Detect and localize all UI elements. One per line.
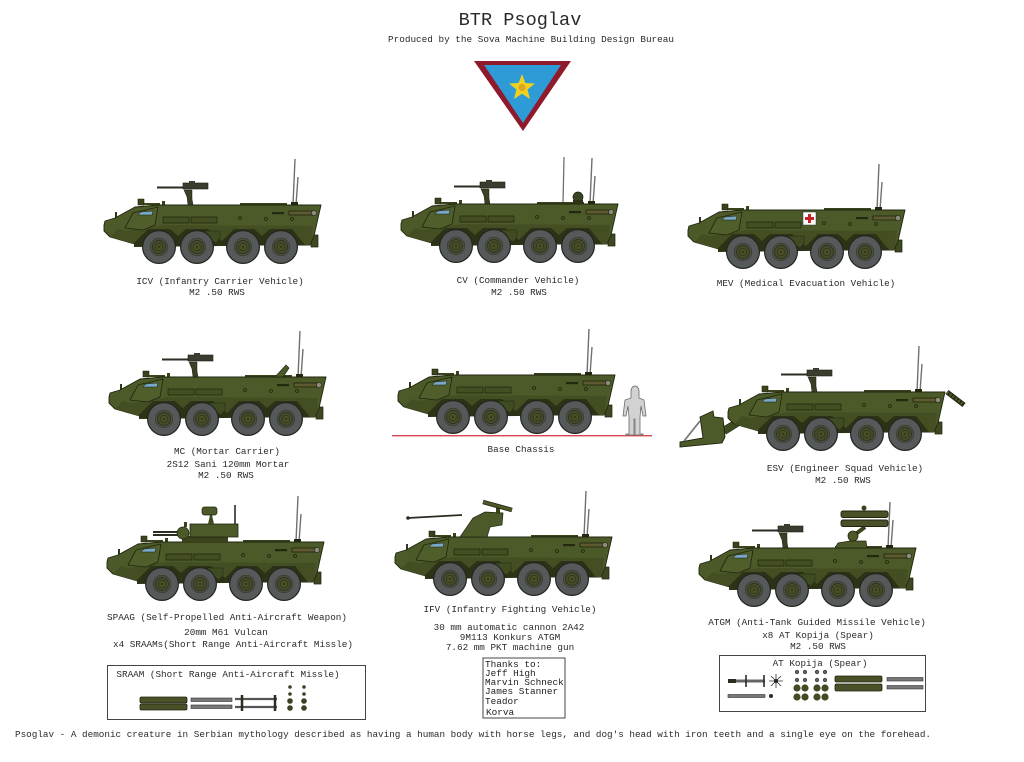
caption: IFV: 9M113 Konkurs ATGM xyxy=(460,632,560,643)
credits text: James Stanner xyxy=(485,686,558,697)
caption: CV: M2 .50 RWS xyxy=(491,287,547,298)
end views grid xyxy=(793,670,829,701)
vehicle: ICV xyxy=(104,159,321,264)
caption: ESV: ESV (Engineer Squad Vehicle) xyxy=(767,463,923,474)
panel: ESV xyxy=(680,346,964,486)
caption: ATGM: ATGM (Anti-Tank Guided Missile Vehicle) xyxy=(708,617,926,628)
heading: SRAAM: SRAAM (Short Range Anti-Aircraft Missle) xyxy=(116,669,340,680)
caption: base chassis: Base Chassis xyxy=(488,444,554,455)
caption: ESV: M2 .50 RWS xyxy=(815,475,871,486)
tubes xyxy=(191,698,232,708)
caption: ATGM: M2 .50 RWS xyxy=(790,641,846,652)
icon: human scale figure xyxy=(623,386,646,435)
caption: MC: 2S12 Sani 120mm Mortar xyxy=(167,459,289,470)
panel: SPAAG xyxy=(107,496,353,650)
panel: AT Kopija legend box xyxy=(720,656,926,712)
title: BTR Psoglav xyxy=(459,10,581,31)
caption: IFV: IFV (Infantry Fighting Vehicle) xyxy=(424,604,596,615)
panel: ATGM xyxy=(699,502,926,652)
panel: SRAAM legend box xyxy=(108,666,366,720)
vehicle: ATGM xyxy=(699,502,916,607)
panel: thanks box xyxy=(483,658,565,718)
missile tube xyxy=(728,694,765,698)
caption: IFV: 7.62 mm PKT machine gun xyxy=(446,642,574,653)
credits text: Teador xyxy=(485,696,519,707)
panel: base chassis xyxy=(392,329,652,455)
credits text: Korva xyxy=(486,707,515,718)
tube end dot xyxy=(769,694,773,698)
vehicle: MC xyxy=(109,331,326,436)
panel: MEV xyxy=(688,164,905,289)
dozer blade xyxy=(680,411,742,447)
subtitle: Produced by the Sova Machine Building Design Bureau xyxy=(388,34,674,45)
heading: AT Kopija: AT Kopija (Spear) xyxy=(773,658,867,669)
panel: IFV xyxy=(395,491,612,653)
footer note: Psoglav - A demonic creature in Serbian mythology described as having a human body with horse legs, and dog's head with iron teeth and a single eye on the forehead. xyxy=(15,729,931,740)
vehicle: ESV xyxy=(680,346,964,451)
launcher xyxy=(140,697,187,710)
panel: MC xyxy=(109,331,326,481)
credits text: Jeff High xyxy=(485,668,536,679)
rear ramp xyxy=(947,392,964,405)
vehicle: base chassis xyxy=(398,329,615,434)
missiles xyxy=(235,695,277,711)
caption: MC: M2 .50 RWS xyxy=(198,470,254,481)
emblem: inverted triangle with star xyxy=(474,61,571,131)
caption: ICV: M2 .50 RWS xyxy=(189,287,245,298)
caption: IFV: 30 mm automatic cannon 2A42 xyxy=(434,622,584,633)
vehicle: CV xyxy=(401,157,618,263)
vehicle: IFV xyxy=(395,491,612,596)
icon: red cross xyxy=(803,212,816,225)
Vulcan turret xyxy=(153,505,238,542)
caption: SPAAG: 20mm M61 Vulcan xyxy=(184,627,268,638)
launcher pods xyxy=(835,676,882,691)
panel: ICV xyxy=(104,159,321,298)
missile end views xyxy=(287,685,307,711)
caption: SPAAG: x4 SRAAMs(Short Range Anti-Aircraft Missle) xyxy=(113,639,353,650)
vehicle: SPAAG xyxy=(107,496,324,601)
panel: CV xyxy=(401,157,618,298)
gray tubes xyxy=(887,678,923,689)
caption: ATGM: x8 AT Kopija (Spear) xyxy=(762,630,874,641)
caption: MC: MC (Mortar Carrier) xyxy=(174,446,280,457)
caption: MEV: MEV (Medical Evacuation Vehicle) xyxy=(717,278,895,289)
caption: SPAAG: SPAAG (Self-Propelled Anti-Aircraft Weapon) xyxy=(107,612,347,623)
caption: CV: CV (Commander Vehicle) xyxy=(457,275,579,286)
missile launcher xyxy=(835,506,888,548)
caption: ICV: ICV (Infantry Carrier Vehicle) xyxy=(136,276,304,287)
vehicle: MEV xyxy=(688,164,905,269)
ground line xyxy=(392,435,652,436)
credits text: Thanks to: xyxy=(485,659,541,670)
credits text: Marvin Schneck xyxy=(485,677,564,688)
cannon turret xyxy=(406,502,512,537)
missile with fins xyxy=(728,675,765,687)
missile end view star xyxy=(769,674,783,688)
